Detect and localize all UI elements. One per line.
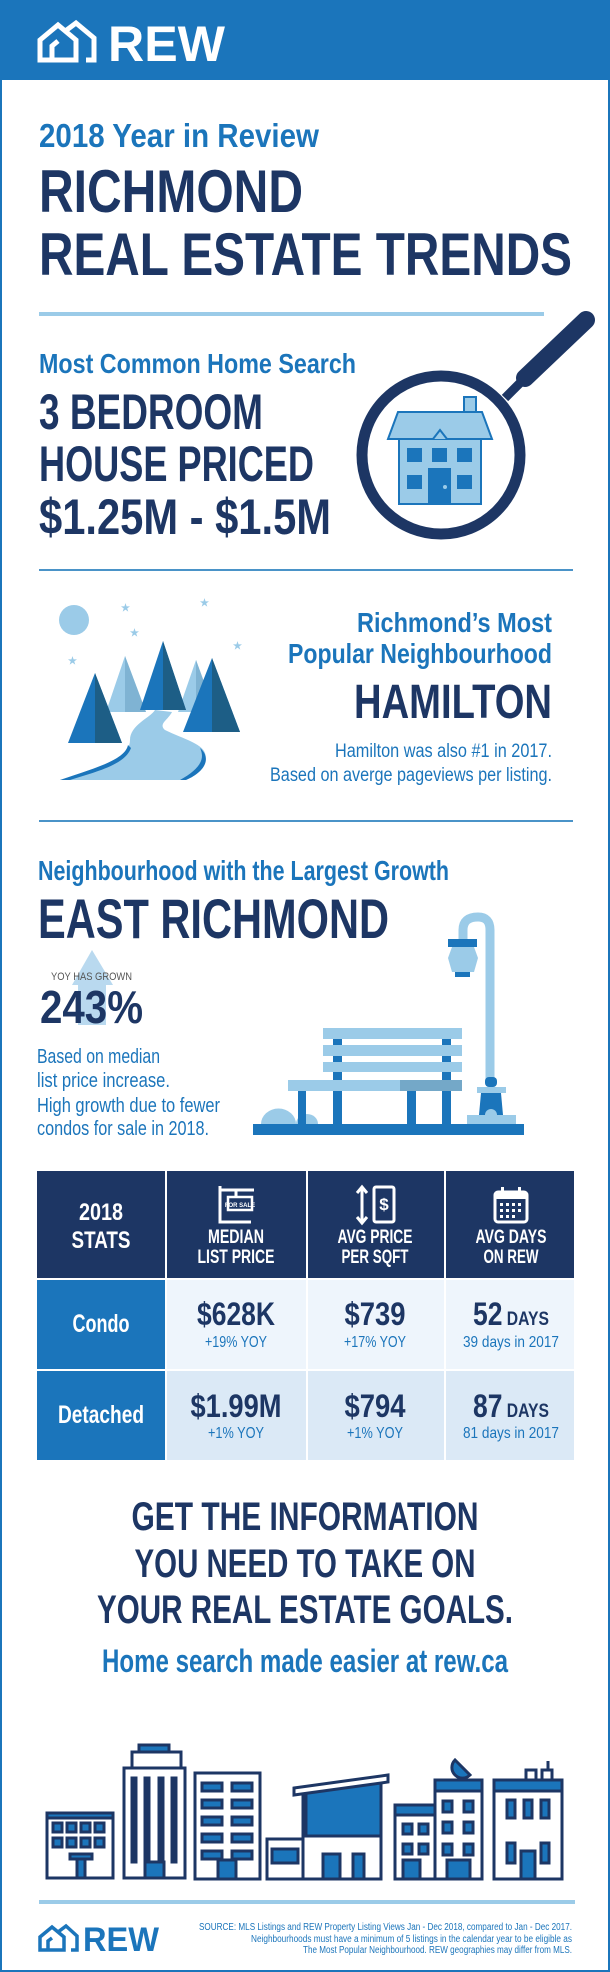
icon: magnifier with house bbox=[362, 320, 586, 534]
table row: condo: $739 bbox=[344, 1296, 406, 1332]
table row: condo: +19% YOY bbox=[205, 1334, 267, 1351]
panel: most common home search bbox=[39, 348, 356, 545]
icon: price per sqft: $ bbox=[379, 1195, 389, 1214]
table header row: 2018 bbox=[79, 1199, 123, 1226]
icon: calendar bbox=[495, 1187, 527, 1222]
icon: forest and river bbox=[59, 598, 242, 780]
table row: condo: $628K bbox=[197, 1296, 275, 1332]
icon: city skyline bbox=[47, 1745, 562, 1879]
icon: for sale sign: FOR SALE bbox=[225, 1203, 255, 1209]
panel: most popular neighbourhood: Based on averge pageviews per listing. bbox=[270, 765, 552, 786]
source footnote bbox=[199, 1922, 572, 1956]
table row: condo: Condo bbox=[72, 1310, 130, 1338]
table header row: MEDIAN bbox=[208, 1227, 264, 1248]
panel: largest growth: Neighbourhood with the Largest Growth bbox=[38, 855, 449, 886]
panel: most common home search: 3 BEDROOM bbox=[39, 384, 263, 440]
table row: detached bbox=[37, 1371, 574, 1460]
table header row bbox=[37, 1171, 574, 1278]
table header row: AVG PRICE bbox=[338, 1227, 412, 1248]
icon: forest and river: ★ bbox=[200, 598, 209, 609]
table header row: PER SQFT bbox=[342, 1247, 409, 1268]
title block bbox=[39, 117, 572, 288]
title block: 2018 Year in Review bbox=[39, 117, 319, 154]
icon: for sale sign bbox=[220, 1186, 255, 1222]
call to action: YOU NEED TO TAKE ON bbox=[134, 1542, 476, 1586]
icon: forest and river: ★ bbox=[121, 603, 130, 614]
logo text: REW bbox=[108, 16, 226, 72]
panel: largest growth bbox=[37, 855, 449, 1140]
header bar bbox=[0, 0, 610, 80]
panel: most popular neighbourhood: Richmond’s Most bbox=[357, 607, 552, 638]
icon: forest and river: ★ bbox=[233, 641, 242, 652]
table row: detached: +1% YOY bbox=[208, 1425, 264, 1442]
panel: most common home search: HOUSE PRICED bbox=[39, 436, 314, 492]
panel: largest growth: list price increase. bbox=[37, 1070, 170, 1092]
panel: largest growth: condos for sale in 2018. bbox=[37, 1118, 209, 1140]
panel: most common home search: Most Common Home Search bbox=[39, 348, 356, 379]
icon: forest and river: ★ bbox=[130, 628, 139, 639]
icon: forest and river: ★ bbox=[68, 656, 77, 667]
call to action bbox=[97, 1495, 513, 1679]
panel: most common home search: $1.25M - $1.5M bbox=[39, 489, 331, 545]
table row: detached: $1.99M bbox=[190, 1388, 282, 1424]
panel: largest growth: EAST RICHMOND bbox=[38, 887, 389, 950]
panel: largest growth: YOY HAS GROWN bbox=[51, 971, 132, 983]
table row: detached: 81 days in 2017 bbox=[463, 1425, 559, 1442]
title block: RICHMOND bbox=[39, 158, 303, 225]
panel: largest growth: 243% bbox=[40, 981, 143, 1033]
table header row: LIST PRICE bbox=[198, 1247, 274, 1268]
panel: largest growth: Based on median bbox=[37, 1046, 160, 1068]
panel: most popular neighbourhood bbox=[270, 607, 552, 786]
footer logo: REW bbox=[83, 1921, 160, 1959]
footer logo bbox=[40, 1921, 160, 1959]
icon: up arrow bbox=[72, 950, 113, 1025]
panel: most popular neighbourhood: Hamilton was also #1 in 2017. bbox=[335, 741, 552, 762]
table row: condo: 39 days in 2017 bbox=[463, 1334, 559, 1351]
icon: bench and lamp post bbox=[253, 917, 524, 1135]
table row: detached: $794 bbox=[344, 1388, 406, 1424]
call to action: GET THE INFORMATION bbox=[132, 1495, 478, 1539]
panel: largest growth: High growth due to fewer bbox=[37, 1095, 220, 1117]
table row: condo: 52 DAYS bbox=[473, 1296, 549, 1332]
table row: detached: +1% YOY bbox=[347, 1425, 403, 1442]
table header row: STATS bbox=[72, 1227, 130, 1254]
icon: price per sqft bbox=[357, 1187, 394, 1223]
table row: condo bbox=[37, 1280, 574, 1369]
panel: most popular neighbourhood: Popular Neighbourhood bbox=[288, 638, 552, 669]
table row: condo: +17% YOY bbox=[344, 1334, 406, 1351]
table header row: AVG DAYS bbox=[476, 1227, 546, 1248]
panel: most popular neighbourhood: HAMILTON bbox=[354, 676, 552, 729]
stats table bbox=[37, 1171, 574, 1460]
table header row: ON REW bbox=[484, 1247, 539, 1268]
table row: detached: Detached bbox=[58, 1401, 144, 1429]
table row: detached: 87 DAYS bbox=[473, 1388, 549, 1424]
icon: REW logo house bbox=[40, 23, 94, 60]
